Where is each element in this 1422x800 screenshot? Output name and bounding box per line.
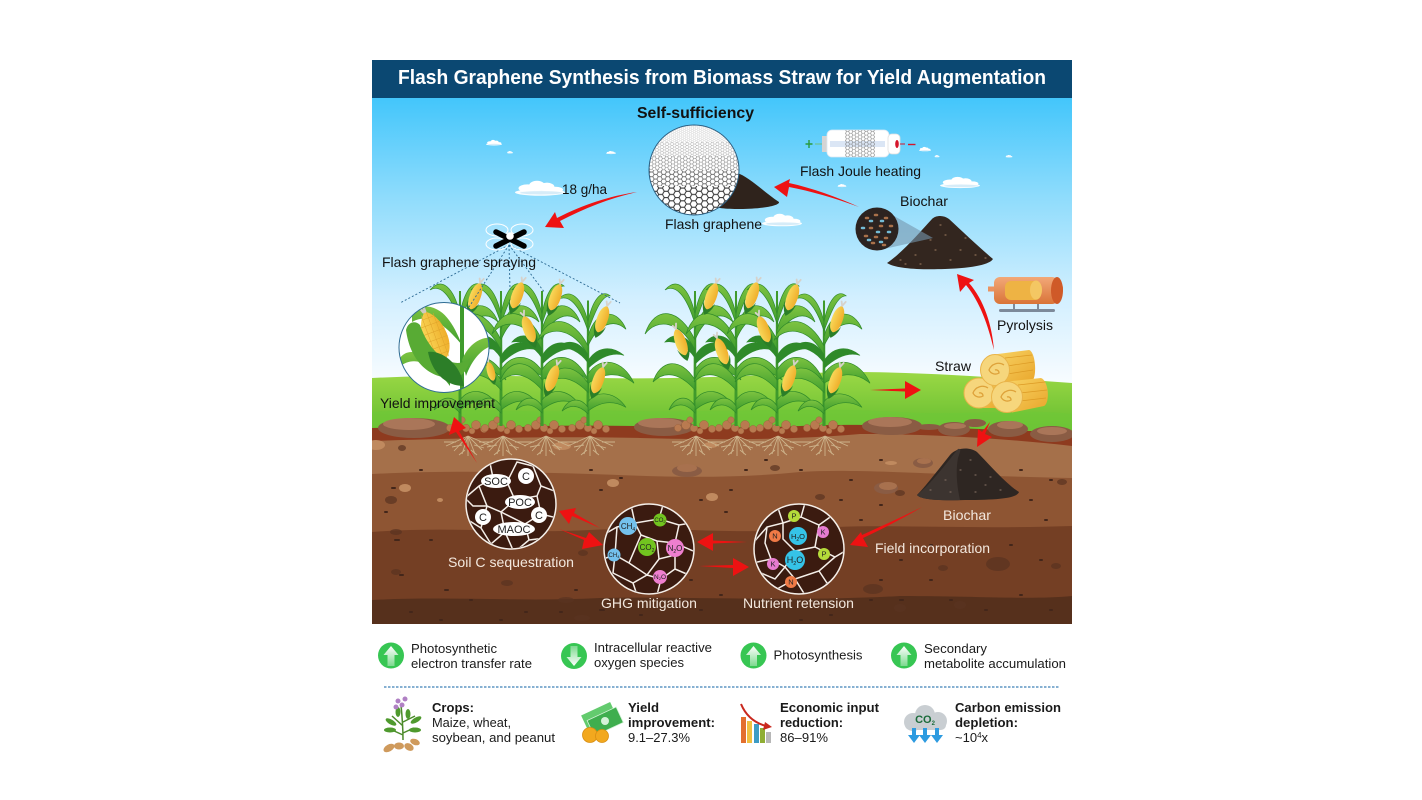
soil circle: ghg mitigation: 2: [663, 519, 666, 524]
arrow: biochar to nutrient: [850, 507, 922, 547]
legend text: reactive oxygen: oxygen species: [594, 655, 684, 670]
soil circle: carbon sequestration: C: [522, 471, 530, 483]
icon: flash joule heater: [806, 130, 916, 157]
legend text: secondary metabolite: [924, 641, 1066, 671]
icon: up arrow photosynthesis: [740, 642, 766, 668]
arrow: straw down to biochar: [977, 422, 992, 447]
soil circle: ghg mitigation: 2: [673, 549, 676, 555]
text: crops: soybean, and peanut: [432, 730, 555, 745]
soil circle: nutrient retention: O: [799, 532, 805, 541]
soil circle: carbon sequestration: MAOC: [498, 524, 531, 536]
label: 18 g/ha: 18 g/ha: [562, 181, 607, 197]
icon: money: [581, 702, 623, 742]
arrow: soil to ghg: [559, 529, 603, 549]
grass field: [372, 372, 1072, 431]
label: flash graphene spraying: Flash graphene spraying: [382, 254, 536, 270]
heading: self-sufficiency: Self-sufficiency: [637, 105, 754, 122]
soil circle: nutrient retention: N: [772, 532, 778, 540]
soil circle: nutrient retention: [753, 503, 845, 595]
soil circle: nutrient retention: H: [787, 555, 793, 565]
graphene circle: [648, 124, 740, 217]
soil circle: ghg mitigation: CH: [621, 522, 632, 531]
label: straw: Straw: [935, 358, 972, 374]
spray lines: [400, 245, 620, 307]
text: economic input reduction: 86–91%: [780, 730, 828, 745]
icon: down arrow ros: [561, 643, 587, 669]
text: carbon emission depletion: [955, 700, 1061, 745]
label: nutrient retension: Nutrient retension: [743, 595, 854, 611]
infographic canvas: [372, 60, 1072, 752]
soil layers: [372, 425, 1072, 624]
text: carbon emission depletion: Carbon emission: [955, 700, 1061, 715]
soil circle: nutrient retention: P: [791, 512, 797, 520]
surface rocks: [378, 417, 1074, 494]
arrow: soil to yield: [449, 417, 477, 463]
text: carbon emission depletion: 4: [977, 731, 982, 740]
text: economic input reduction: [780, 700, 880, 745]
title bar: [372, 60, 1072, 98]
lower biochar pile: [917, 449, 1019, 500]
flash graphene pile: [719, 174, 779, 209]
soil circle: ghg mitigation: O: [676, 544, 682, 553]
label: biochar lower: Biochar: [943, 507, 991, 523]
soil circle: nutrient retention: K: [820, 528, 826, 536]
label: flash joule heating: Flash Joule heating: [800, 163, 921, 179]
legend row: upregulated and downregulated effects: [378, 640, 1066, 671]
soil circle: ghg mitigation: 4: [617, 554, 620, 559]
text: economic input reduction: reduction:: [780, 715, 843, 730]
label: flash graphene: Flash graphene: [665, 216, 762, 232]
legend text: electron transfer: [411, 641, 532, 671]
label: ghg mitigation: GHG mitigation: [601, 595, 697, 611]
biochar pile with close-up: [856, 208, 993, 269]
text: carbon emission depletion: depletion:: [955, 715, 1018, 730]
arrow: straw to biochar: [957, 274, 994, 350]
label: yield improvement: Yield improvement: [380, 395, 495, 411]
text: crops: Maize, wheat,: [432, 715, 511, 730]
icon: co2 cloud: [904, 705, 947, 743]
soil circle: ghg mitigation: CO: [654, 518, 663, 524]
arrow: ghg to nutrient: [699, 558, 749, 576]
soil circle: nutrient retention: P: [821, 550, 827, 558]
text: crops: [432, 700, 555, 745]
soil circle: carbon sequestration: POC: [508, 497, 532, 509]
text: carbon emission depletion: x: [982, 730, 989, 745]
label: pyrolysis: Pyrolysis: [997, 317, 1053, 333]
soil circle: ghg mitigation: 2: [659, 576, 662, 581]
label: field incorporation: Field incorporation: [875, 540, 990, 556]
clouds: [486, 140, 1012, 226]
soil circle: carbon sequestration: C: [479, 512, 487, 524]
root clumps: [444, 417, 850, 456]
legend text: secondary metabolite: metabolite accumulation: [924, 656, 1066, 671]
soil circle: ghg mitigation: O: [661, 574, 666, 581]
arrow: ghg to soil: [559, 508, 600, 528]
soil circle: ghg mitigation: 4: [632, 527, 635, 533]
legend text: photosynthesis: Photosynthesis: [774, 648, 863, 662]
soil circle: nutrient retention: K: [770, 560, 776, 568]
legend text: electron transfer: Photosynthetic: [411, 641, 497, 656]
soil circle: nutrient retention: 2: [796, 537, 799, 543]
panel: farm scene: [367, 98, 1074, 624]
text: carbon emission depletion: ~10: [955, 730, 977, 745]
soil circle: carbon sequestration: C: [535, 510, 543, 522]
soil circle: nutrient retention: 2: [793, 561, 796, 567]
text: yield improvement: improvement:: [628, 715, 715, 730]
soil circle: ghg mitigation: N: [668, 544, 673, 553]
title: Flash Graphene Synthesis from Biomass Straw for Yield Augmentation: [398, 67, 1046, 89]
soil circle: nutrient retention: O: [796, 555, 803, 565]
soil circle: ghg mitigation: CH: [609, 553, 617, 559]
text: yield improvement: Yield: [628, 700, 659, 715]
soil specks: [367, 440, 1067, 621]
text: economic input reduction: Economic input: [780, 700, 880, 715]
corn plants: left group: [410, 275, 634, 426]
arrow: nutrient to ghg: [697, 533, 747, 551]
arrow: graphene to drone: [545, 192, 637, 228]
soil circle: ghg mitigation: N: [654, 574, 659, 581]
arrow: biochar to graphene: [774, 179, 859, 207]
legend text: reactive oxygen: Intracellular reactive: [594, 640, 712, 655]
icon: drone: [486, 224, 533, 250]
icon: co2 cloud: CO: [915, 714, 932, 726]
icon: co2 cloud: 2: [932, 721, 936, 727]
icon: straw bales: [964, 350, 1048, 412]
icon: cost reduction chart: [741, 704, 772, 743]
soil circle: carbon sequestration: [465, 458, 557, 550]
soil circle: ghg mitigation: 2: [652, 548, 655, 554]
text: yield improvement: [628, 700, 715, 745]
soil circle: carbon sequestration: SOC: [484, 476, 508, 488]
legend text: electron transfer: electron transfer rate: [411, 656, 532, 671]
summary row: [382, 696, 1061, 754]
icon: pyrolysis furnace: [988, 277, 1063, 312]
soil circle: nutrient retention: H: [791, 532, 796, 541]
legend text: reactive oxygen: [594, 640, 712, 670]
icon: up arrow electron transfer: [378, 642, 404, 668]
soil circle: nutrient retention: N: [788, 578, 794, 586]
corn plants: right group: [645, 275, 870, 426]
corn close-up circle: [398, 302, 490, 393]
legend text: secondary metabolite: Secondary: [924, 641, 988, 656]
sky background: [372, 98, 1072, 383]
arrow: field to straw: [870, 381, 921, 399]
icon: up arrow secondary metabolite: [891, 642, 917, 668]
soil circle: ghg mitigation: [603, 504, 694, 595]
icon: peanut plant: [382, 696, 422, 754]
text: yield improvement: 9.1–27.3%: [628, 730, 690, 745]
text: crops: Crops:: [432, 700, 474, 715]
soil circle: ghg mitigation: CO: [640, 543, 652, 552]
label: soil c sequestration: Soil C sequestration: [448, 554, 574, 570]
label: biochar top: Biochar: [900, 193, 948, 209]
